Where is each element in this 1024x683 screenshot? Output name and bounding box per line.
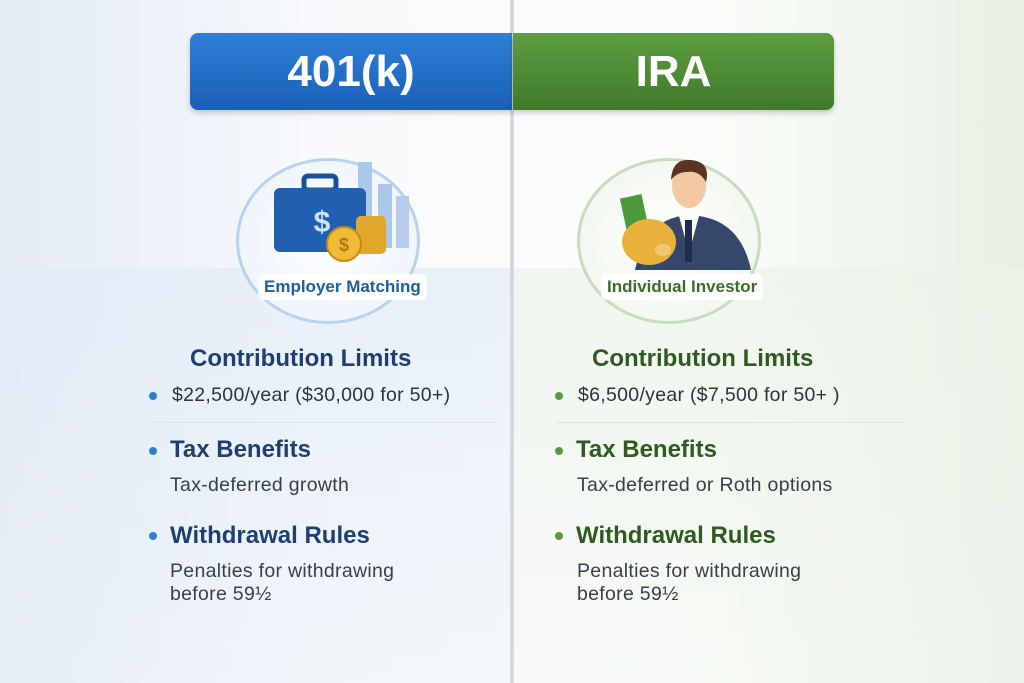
panel: 401k details: Withdrawal Rules: [170, 522, 370, 549]
panel: 401k details: Penalties for withdrawing: [170, 560, 394, 582]
panel: IRA details: Contribution Limits: [592, 345, 813, 372]
icon: employer matching: $: [339, 235, 349, 255]
panel: IRA details: $6,500/year ($7,500 for 50+ ): [578, 384, 840, 406]
panel: IRA details: [555, 345, 905, 605]
panel: 401k details: [148, 345, 498, 605]
panel: IRA details: Penalties for withdrawing: [577, 560, 801, 582]
label: Individual Investor: Individual Investor: [607, 277, 757, 296]
panel: 401k details: before 59½: [170, 583, 272, 605]
label: Employer Matching: [258, 274, 427, 300]
label: Employer Matching: Employer Matching: [264, 277, 421, 296]
panel: 401k details: Tax-deferred growth: [170, 474, 349, 496]
panel: 401k details: Contribution Limits: [190, 345, 411, 372]
icon: individual investor: [577, 158, 763, 324]
panel: IRA details: Tax Benefits: [576, 436, 717, 463]
panel: 401k details: Tax Benefits: [170, 436, 311, 463]
icon: employer matching: $: [314, 206, 331, 239]
header: 401(k): 401(k): [287, 47, 415, 96]
header: 401(k): [190, 33, 512, 110]
panel: IRA details: Tax-deferred or Roth options: [577, 474, 833, 496]
panel: IRA details: Withdrawal Rules: [576, 522, 776, 549]
header: IRA: [513, 33, 834, 110]
icon: employer matching: [236, 158, 427, 324]
label: Individual Investor: [601, 274, 763, 300]
panel: 401k details: $22,500/year ($30,000 for 50+): [172, 384, 450, 406]
panel: IRA details: before 59½: [577, 583, 679, 605]
header: IRA: IRA: [636, 47, 711, 96]
